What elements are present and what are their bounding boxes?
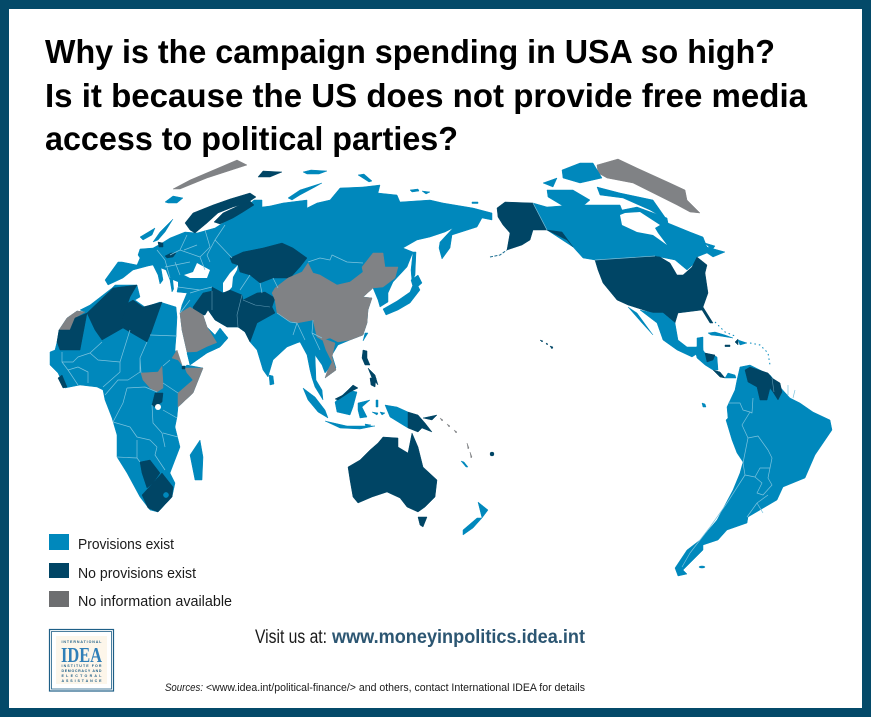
map: Australia bbox=[348, 433, 437, 512]
map: New Zealand bbox=[463, 502, 488, 535]
island: Ireland bbox=[140, 228, 155, 240]
country: Honduras bbox=[705, 353, 715, 362]
island: New Britain bbox=[423, 415, 437, 420]
country: Alaska bbox=[497, 202, 547, 250]
website link: www.moneyinpolitics.idea.int bbox=[331, 627, 586, 648]
borders: USA and Canada bbox=[533, 203, 655, 260]
island: Borneo bbox=[335, 390, 357, 415]
logo: International IDEA: INTERNATIONAL bbox=[62, 640, 102, 644]
logo: International IDEA: ASSISTANCE bbox=[62, 679, 102, 683]
country: Hungary bbox=[165, 253, 176, 258]
island: Vanuatu bbox=[461, 461, 468, 467]
islands: Pacific specks bbox=[440, 418, 472, 458]
islands: Hawaii bbox=[540, 340, 553, 349]
country: South Africa bbox=[142, 473, 173, 512]
island: Great Britain bbox=[153, 219, 173, 242]
country: Venezuela and Guyana bbox=[745, 367, 782, 400]
country: Mauritania bbox=[57, 313, 87, 350]
island: Greenland east arm bbox=[173, 160, 247, 189]
island: Galapagos bbox=[702, 403, 706, 407]
sea: Caspian bbox=[223, 265, 238, 293]
world map bbox=[50, 159, 832, 576]
island: Iceland bbox=[165, 196, 183, 203]
island: Hokkaido bbox=[411, 275, 422, 290]
island: Cuba bbox=[708, 332, 733, 338]
map: Central America and Caribbean bbox=[695, 322, 770, 378]
island: Novaya Zemlya bbox=[288, 183, 322, 200]
island: Taiwan bbox=[363, 333, 368, 341]
sources note: Sources: bbox=[165, 682, 203, 694]
map: Tasmania bbox=[418, 517, 427, 527]
country: Algeria bbox=[87, 285, 137, 340]
title: access to political parties? bbox=[45, 120, 458, 157]
islands: Canadian Arctic bbox=[543, 163, 715, 250]
country: Eritrea bbox=[172, 350, 182, 365]
borders: South America bbox=[682, 385, 795, 567]
borders: Eurasia bbox=[157, 225, 363, 350]
country: Alaska panhandle bbox=[547, 230, 573, 247]
country: South Sudan bbox=[141, 366, 163, 392]
map: islands of Europe and Arctic bbox=[140, 160, 478, 242]
island: Jamaica bbox=[725, 345, 730, 347]
islands: Aleutians bbox=[490, 250, 507, 257]
country: Botswana bbox=[140, 460, 160, 488]
island: Sumatra bbox=[303, 388, 328, 418]
country: Baja California bbox=[628, 307, 653, 335]
island: Falklands bbox=[699, 566, 705, 568]
borders: Africa bbox=[62, 330, 178, 470]
title: Why is the campaign spending in USA so high? bbox=[45, 33, 775, 70]
map: South America bbox=[675, 365, 832, 576]
islands: Philippines bbox=[362, 350, 378, 387]
lake: Victoria bbox=[155, 404, 161, 410]
legend item: no information available: No information available bbox=[78, 594, 232, 610]
sources note: <www.idea.int/political-finance/> and others, contact International IDEA for details bbox=[206, 682, 585, 694]
island: Sakhalin bbox=[411, 252, 416, 282]
legend bbox=[49, 534, 232, 610]
country: Liberia bbox=[58, 375, 67, 388]
legend item: provisions exist bbox=[49, 534, 174, 553]
sea: Aegean bbox=[173, 280, 178, 290]
island: Malaysian Borneo bbox=[335, 385, 358, 400]
bay: Hudson bbox=[620, 212, 667, 245]
country: Denmark bbox=[158, 242, 163, 247]
map: North America bbox=[490, 159, 725, 357]
logo: International IDEA: IDEA bbox=[61, 643, 103, 667]
country: Greenland bbox=[597, 159, 700, 213]
logo: International IDEA bbox=[50, 630, 114, 691]
island: Java and Sunda bbox=[325, 421, 375, 429]
title bbox=[45, 33, 808, 157]
legend item: provisions exist: Provisions exist bbox=[78, 537, 174, 553]
country: Western Sahara bbox=[59, 311, 85, 330]
logo: International IDEA: DEMOCRACY AND bbox=[62, 669, 102, 673]
country: Djibouti bbox=[182, 366, 185, 369]
map: Madagascar bbox=[190, 440, 203, 480]
country: Scandinavia bbox=[185, 193, 256, 233]
title: Is it because the US does not provide free media bbox=[45, 77, 808, 114]
island: Dominican Republic bbox=[738, 340, 747, 345]
country: USA bbox=[595, 256, 713, 323]
country: Vietnam bbox=[322, 338, 336, 378]
island: Indonesian New Guinea bbox=[385, 405, 408, 428]
country: Libya bbox=[122, 300, 162, 342]
island: Svalbard bbox=[258, 171, 282, 177]
islands: Moluccas bbox=[365, 400, 385, 427]
legend item: no provisions exist: No provisions exist bbox=[78, 566, 196, 582]
website link: Visit us at: bbox=[255, 627, 327, 648]
country: Kazakhstan bbox=[230, 243, 307, 283]
map: Africa bbox=[50, 285, 203, 512]
islands: Russian Arctic bbox=[303, 170, 478, 204]
country: Panama bbox=[725, 373, 736, 378]
country: China bbox=[272, 253, 398, 342]
country: Iraq Iran Afghanistan Pakistan bbox=[193, 287, 275, 342]
map: Eurasia bbox=[105, 185, 492, 400]
logo: International IDEA: ELECTORAL bbox=[62, 674, 102, 678]
country: Canada bbox=[533, 203, 725, 270]
island: Haiti bbox=[735, 339, 738, 345]
island: Sri Lanka bbox=[269, 375, 274, 385]
country: Somalia bbox=[178, 368, 203, 407]
legend item: no provisions exist bbox=[49, 563, 196, 582]
country: Costa Rica bbox=[713, 370, 725, 378]
islands: Lesser Antilles bbox=[715, 322, 770, 365]
island: Papua New Guinea bbox=[408, 412, 432, 432]
country: Saudi Arabia bbox=[180, 307, 217, 352]
island: Fiji bbox=[490, 452, 494, 456]
sea: Black Sea bbox=[184, 263, 210, 278]
logo: International IDEA: INSTITUTE FOR bbox=[62, 664, 102, 668]
country: Lesotho bbox=[163, 492, 169, 498]
island: Sulawesi bbox=[358, 400, 370, 418]
island: Honshu bbox=[383, 280, 420, 315]
country: Finland bbox=[214, 201, 254, 224]
map: East Asia islands bbox=[269, 252, 494, 467]
country: Mexico bbox=[640, 310, 703, 357]
country: Uganda bbox=[152, 393, 163, 407]
map: Oman and Yemen bbox=[187, 328, 228, 365]
